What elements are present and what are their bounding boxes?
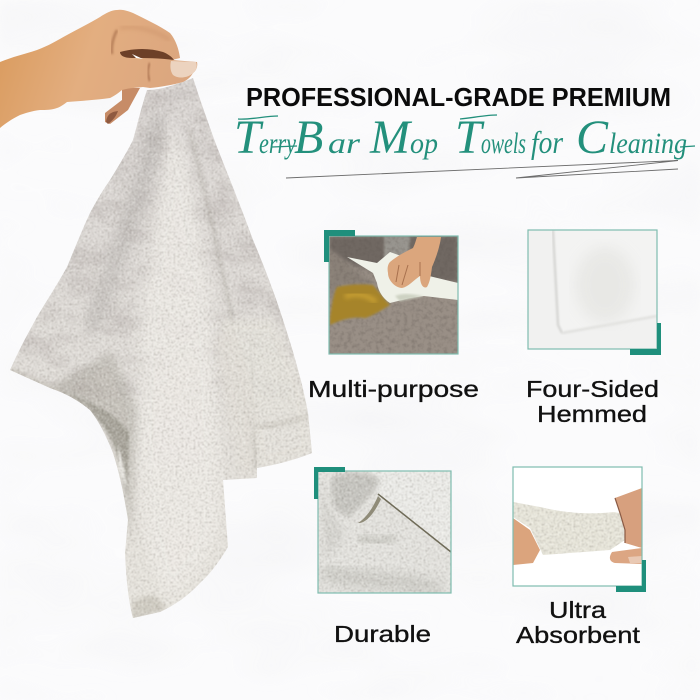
teal corner: [616, 560, 646, 592]
label: Durable: [334, 621, 431, 647]
label: Absorbent: [516, 622, 641, 648]
photo: folded terry close-up: [318, 471, 451, 593]
subheading: script title: T: [455, 111, 485, 164]
heading: Professional-Grade Premium: PROFESSIONAL-GRADE PREMIUM: [246, 84, 671, 112]
photo: wiping oil spill from floor: [329, 236, 458, 354]
subheading: script title: [234, 111, 695, 164]
feature card: four-sided hemmed: [526, 230, 661, 427]
photo: hands wringing towel: [514, 488, 642, 565]
frame: [329, 236, 458, 354]
subheading: script title: op: [410, 127, 438, 160]
feature card: durable: [314, 467, 451, 647]
subheading: script title: owels: [481, 127, 526, 160]
subheading: script title: M: [369, 111, 413, 164]
teal corner: [630, 323, 661, 355]
label: Hemmed: [537, 401, 647, 427]
photo: towel held by hand: [0, 10, 320, 630]
teal corner: [324, 230, 355, 262]
subheading: script title: C: [576, 111, 609, 164]
label: Multi-purpose: [308, 376, 479, 402]
hand and arm: [0, 10, 197, 128]
frame: [513, 467, 642, 586]
subheading: script title: B: [294, 111, 323, 164]
teal corner: [314, 467, 345, 499]
feature card: ultra absorbent: [513, 467, 646, 648]
photo: towel hem close-up: [528, 230, 657, 349]
label: [516, 597, 641, 648]
subheading: script title: leaning: [609, 127, 687, 160]
label: Ultra: [549, 597, 607, 623]
underline strokes: [286, 160, 678, 178]
label: Four-Sided: [526, 376, 659, 402]
frame: [528, 230, 657, 349]
feature card: multi-purpose: [308, 230, 479, 402]
subheading: script title: erry: [259, 127, 297, 160]
towel: [0, 70, 320, 630]
frame: [318, 471, 451, 593]
label: [526, 376, 659, 427]
subheading: script title: ar: [328, 127, 360, 160]
subheading: script title: for: [531, 124, 563, 160]
subheading: script title: T: [234, 111, 264, 164]
